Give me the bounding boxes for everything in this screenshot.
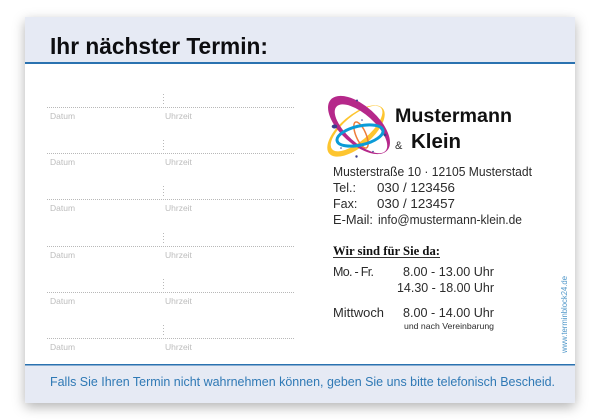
- footer band: [25, 364, 575, 403]
- company name: Klein: [411, 130, 461, 153]
- contact details: Fax:: [333, 197, 357, 211]
- contact details: 030 / 123456: [377, 181, 455, 195]
- opening hours: 8.00 - 13.00 Uhr: [403, 265, 494, 279]
- row 5: [47, 279, 295, 306]
- opening hours: [333, 243, 494, 331]
- title: Ihr nächster Termin:: [50, 33, 268, 59]
- row 1: [47, 94, 295, 121]
- appointment rows: [47, 94, 295, 352]
- contact details: [333, 165, 532, 227]
- row 3: Uhrzeit: [165, 203, 193, 213]
- row 6: Datum: [50, 342, 75, 352]
- row 2: Uhrzeit: [165, 157, 193, 167]
- magenta orbit: [318, 85, 400, 165]
- vertical website text: www.terminblock24.de: [560, 275, 569, 354]
- row 6: [47, 325, 295, 352]
- orange orbit: [351, 120, 371, 150]
- row 5: Datum: [50, 296, 75, 306]
- contact details: Musterstraße 10 · 12105 Musterstadt: [333, 165, 532, 179]
- company name: [395, 106, 512, 153]
- company name: &: [395, 140, 403, 152]
- contact details: E-Mail:: [333, 213, 373, 227]
- opening hours: Mittwoch: [333, 306, 384, 320]
- row 2: [47, 140, 295, 167]
- row 2: Datum: [50, 157, 75, 167]
- contact details: Tel.:: [333, 181, 356, 195]
- row 1: Datum: [50, 111, 75, 121]
- row 6: Uhrzeit: [165, 342, 193, 352]
- opening hours: 8.00 - 14.00 Uhr: [403, 306, 494, 320]
- row 5: Uhrzeit: [165, 296, 193, 306]
- header band: [25, 17, 575, 64]
- opening hours: und nach Vereinbarung: [404, 321, 494, 331]
- row 3: [47, 186, 295, 213]
- contact details: 030 / 123457: [377, 197, 455, 211]
- dots: [332, 100, 386, 158]
- blue orbit: [335, 121, 385, 150]
- yellow orbit: [319, 96, 393, 166]
- opening hours: Mo. - Fr.: [333, 265, 374, 279]
- row 4: Datum: [50, 250, 75, 260]
- row 4: Uhrzeit: [165, 250, 193, 260]
- row 1: Uhrzeit: [165, 111, 193, 121]
- row 4: [47, 233, 295, 260]
- opening hours: 14.30 - 18.00 Uhr: [397, 281, 494, 295]
- contact details: info@mustermann-klein.de: [378, 213, 522, 227]
- hours heading: Wir sind für Sie da:: [333, 243, 440, 258]
- footer note: Falls Sie Ihren Termin nicht wahrnehmen können, geben Sie uns bitte telefonisch Bescheid.: [50, 374, 555, 389]
- company name: Mustermann: [395, 106, 512, 127]
- row 3: Datum: [50, 203, 75, 213]
- icon: atom logo: [318, 85, 400, 166]
